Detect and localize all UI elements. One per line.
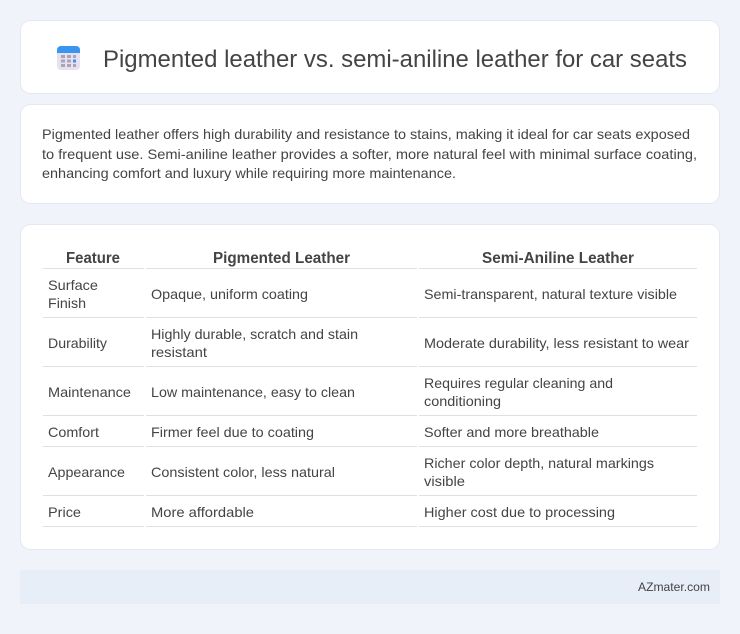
row: appearance: visible (424, 473, 465, 489)
footer credit: AZmater.com (638, 580, 710, 594)
row: surface finish: Surface (48, 277, 98, 293)
row: maintenance (48, 375, 613, 409)
panel: comparison table (20, 224, 720, 550)
title: Pigmented leather vs. semi-aniline leather for car seats (103, 46, 687, 73)
summary text: enhancing comfort and luxury while requiring more maintenance. (42, 165, 456, 181)
summary text (42, 126, 697, 181)
row: appearance: Consistent color, less natural (151, 464, 335, 480)
row: durability (48, 326, 689, 360)
icon: calendar (57, 46, 80, 70)
row: durability: Highly durable, scratch and stain (151, 326, 358, 342)
row: price: More affordable (151, 504, 254, 520)
summary text: Pigmented leather offers high durability and resistance to stains, making it ideal for car seats exposed (42, 126, 690, 142)
row: durability: Moderate durability, less resistant to wear (424, 335, 689, 351)
row: price (48, 504, 615, 520)
table header row: Feature (66, 250, 120, 267)
row: maintenance: Maintenance (48, 384, 131, 400)
row: comfort: Comfort (48, 424, 99, 440)
panel: summary (20, 104, 720, 204)
panel: title card (20, 20, 720, 94)
table header row: Pigmented Leather (213, 250, 350, 267)
summary text: to frequent use. Semi-aniline leather provides a softer, more natural feel with minimal surface coating, (42, 146, 697, 162)
row: comfort: Softer and more breathable (424, 424, 599, 440)
row: price: Price (48, 504, 81, 520)
panel: footer (20, 570, 720, 604)
row: durability: resistant (151, 344, 207, 360)
row: durability: Durability (48, 335, 107, 351)
row: surface finish: Semi-transparent, natural texture visible (424, 286, 677, 302)
row: appearance: Richer color depth, natural markings (424, 455, 654, 471)
row: appearance (48, 455, 654, 489)
table header row: Semi-Aniline Leather (482, 250, 634, 267)
row: price: Higher cost due to processing (424, 504, 615, 520)
row: maintenance: conditioning (424, 393, 501, 409)
row: appearance: Appearance (48, 464, 125, 480)
row: surface finish: Opaque, uniform coating (151, 286, 308, 302)
row: maintenance: Low maintenance, easy to clean (151, 384, 355, 400)
row: comfort: Firmer feel due to coating (151, 424, 314, 440)
row: comfort (48, 424, 599, 440)
table header row (66, 250, 634, 267)
row: surface finish (48, 277, 677, 311)
row: maintenance: Requires regular cleaning and (424, 375, 613, 391)
row: surface finish: Finish (48, 295, 86, 311)
